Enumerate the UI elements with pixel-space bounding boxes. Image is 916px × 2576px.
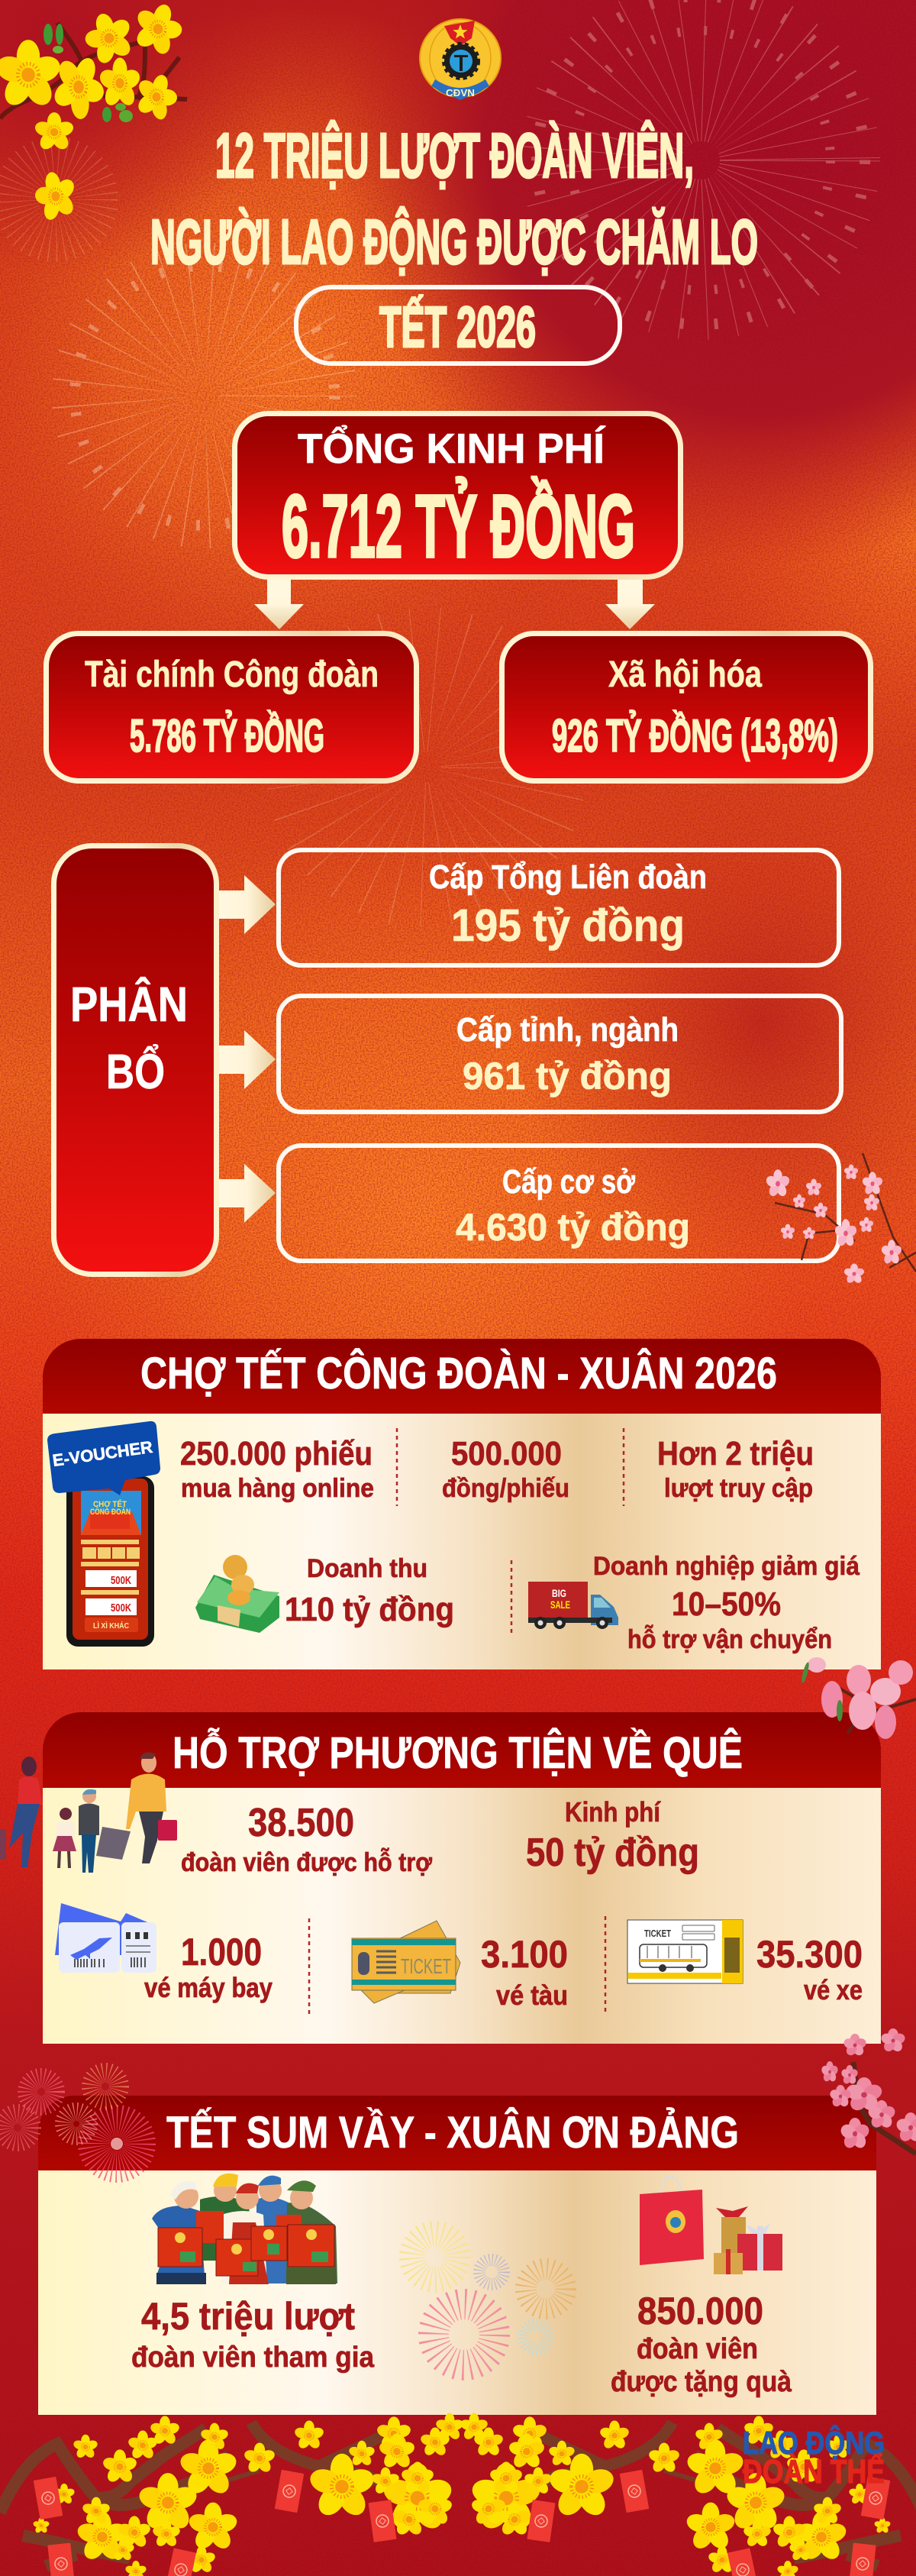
panel: confederation level: 195 tỷ đồng (451, 900, 685, 951)
icon: phone with voucher page: CHỢ TẾT (93, 1499, 127, 1509)
icon: train ticket: TICKET (401, 1954, 451, 1978)
pill: Tet 2026 (296, 287, 620, 364)
text: voucher value: đồng/phiếu (442, 1474, 569, 1503)
text: discounts: hỗ trợ vận chuyển (627, 1625, 832, 1654)
panel: total budget: 6.712 TỶ ĐỒNG (282, 477, 635, 576)
panel header (43, 1712, 881, 1788)
text: visits: lượt truy cập (664, 1474, 813, 1503)
text: train tickets: vé tàu (496, 1980, 568, 2011)
panel: union finance (46, 634, 417, 781)
panel body (43, 1414, 881, 1669)
arrow: to union finance (254, 580, 304, 629)
icon: phone with voucher page: 500K (111, 1574, 131, 1587)
panel: Tet sum vay (38, 2096, 876, 2415)
icon: phone with voucher page: CÔNG ĐOÀN (90, 1507, 131, 1517)
logo: Lao Dong Doan The (743, 2424, 885, 2490)
text: vouchers (180, 1435, 374, 1503)
text: funding: 50 tỷ đồng (526, 1831, 699, 1875)
text: gift recipients: đoàn viên (637, 2333, 758, 2365)
panel header (43, 1339, 881, 1414)
left half (0, 2413, 464, 2576)
apricot garland bottom (0, 2413, 916, 2576)
icon: gift boxes (714, 2206, 782, 2274)
logo: Cong doan Viet Nam: CĐVN (446, 87, 475, 99)
panel: grassroots level (279, 1146, 839, 1261)
panel: province level: Cấp tỉnh, ngành (456, 1011, 679, 1049)
text: revenue: 110 tỷ đồng (285, 1591, 454, 1628)
text: members supported: 38.500 (248, 1801, 354, 1845)
panel: province level: 961 tỷ đồng (463, 1055, 672, 1097)
panel: total budget (235, 414, 681, 577)
panel: socialised funding: Xã hội hóa (608, 655, 762, 695)
icon: phone with voucher page: LÌ XÌ KHÁC (93, 1621, 129, 1631)
text: participants: 4,5 triệu lượt (141, 2295, 355, 2338)
icon: e-voucher tag (47, 1421, 160, 1495)
icon: delivery truck: SALE (550, 1598, 570, 1611)
panel: allocation label (53, 846, 217, 1274)
text: participants: đoàn viên tham gia (131, 2342, 375, 2374)
icon: money and coins (195, 1555, 279, 1633)
panel body (43, 1788, 881, 2044)
logo: Cong doan Viet Nam (420, 19, 501, 100)
text: discounts: Doanh nghiệp giảm giá (593, 1552, 860, 1581)
text: plane tickets: vé máy bay (144, 1972, 273, 2003)
text: visits: Hơn 2 triệu (657, 1435, 814, 1472)
panel header: HỖ TRỢ PHƯƠNG TIỆN VỀ QUÊ (173, 1728, 743, 1778)
panel: socialised funding (502, 634, 870, 781)
text: funding: Kinh phí (565, 1796, 661, 1828)
text: members supported (181, 1801, 433, 1877)
decor: fireworks in panel (412, 2234, 566, 2365)
icon: delivery truck: BIG (552, 1587, 566, 1599)
text: bus tickets: 35.300 (756, 1933, 863, 1976)
icon: phone with voucher page (66, 1476, 154, 1647)
arrow: allocation 3 (219, 1164, 276, 1223)
panel: union finance: Tài chính Công đoàn (85, 655, 379, 695)
right half (460, 2413, 916, 2576)
illustration: family travelling (0, 1753, 177, 1873)
icon: e-voucher tag: E-VOUCHER (51, 1437, 154, 1470)
logo: Lao Dong Doan The: LAO ĐỘNG (743, 2424, 885, 2461)
text: bus tickets (756, 1933, 863, 2006)
text: voucher value: 500.000 (451, 1435, 562, 1472)
panel: allocation label: BỔ (106, 1043, 165, 1099)
text: funding (526, 1796, 699, 1875)
panel: Ho tro phuong tien ve que (0, 1712, 881, 2044)
icon: train ticket (352, 1921, 460, 2003)
text: bus tickets: vé xe (804, 1974, 863, 2006)
panel: total budget: TỔNG KINH PHÍ (298, 425, 606, 472)
icon: plane ticket (55, 1903, 156, 1973)
firework: top right (537, 0, 865, 325)
icon: gift bag (640, 2177, 704, 2265)
fireworks top left of panel (4, 2073, 140, 2167)
peach blossom upper (800, 1657, 916, 1739)
arrow: allocation 2 (219, 1030, 276, 1089)
panel: province level (279, 996, 841, 1112)
panel body (38, 2170, 876, 2415)
text: plane tickets (144, 1931, 273, 2003)
text: revenue (285, 1554, 454, 1628)
panel header: CHỢ TẾT CÔNG ĐOÀN - XUÂN 2026 (140, 1349, 777, 1398)
title (150, 120, 758, 277)
peach blossom lower right (821, 2028, 916, 2154)
text: voucher value (442, 1435, 569, 1503)
text: gift recipients (611, 2290, 792, 2398)
text: gift recipients: được tặng quà (611, 2366, 792, 2398)
panel: Cho Tet Cong Doan (43, 1339, 881, 1669)
firework: left (16, 160, 95, 239)
text: members supported: đoàn viên được hỗ trợ (181, 1848, 433, 1877)
text: discounts: 10–50% (672, 1585, 781, 1623)
panel: confederation level (279, 850, 839, 965)
panel: union finance: 5.786 TỶ ĐỒNG (130, 710, 324, 761)
text: visits (657, 1435, 814, 1503)
text: gift recipients: 850.000 (637, 2290, 763, 2332)
text: train tickets (481, 1933, 568, 2011)
text: revenue: Doanh thu (307, 1554, 427, 1583)
panel: grassroots level: 4.630 tỷ đồng (456, 1206, 690, 1249)
panel header: TẾT SUM VẦY - XUÂN ƠN ĐẢNG (166, 2108, 739, 2157)
firework: orange centre (75, 266, 334, 525)
icon: bus ticket (627, 1920, 743, 1983)
illustration: workers with gift bags (152, 2174, 337, 2284)
text: train tickets: 3.100 (481, 1933, 568, 1976)
arrow: allocation 1 (219, 875, 276, 934)
text: plane tickets: 1.000 (181, 1931, 262, 1973)
panel: allocation label: PHÂN (70, 976, 188, 1032)
icon: phone with voucher page: 500K (111, 1602, 131, 1614)
peach blossom right (765, 1153, 916, 1285)
icon: delivery truck (528, 1582, 618, 1629)
text: discounts (593, 1552, 860, 1654)
panel: grassroots level: Cấp cơ sở (502, 1163, 636, 1201)
text: vouchers: mua hàng online (181, 1474, 374, 1503)
panel: confederation level: Cấp Tổng Liên đoàn (429, 858, 707, 896)
pill: Tet 2026: TẾT 2026 (379, 295, 536, 359)
apricot branch top left (0, 0, 190, 228)
text: vouchers: 250.000 phiếu (180, 1435, 373, 1472)
panel header (38, 2096, 876, 2170)
firework: lower centre (338, 680, 514, 855)
arrow: to socialised funding (605, 580, 655, 629)
text: participants (131, 2295, 375, 2374)
icon: bus ticket: TICKET (644, 1928, 671, 1939)
logo: Lao Dong Doan The: ĐOÀN THỂ (743, 2452, 885, 2490)
